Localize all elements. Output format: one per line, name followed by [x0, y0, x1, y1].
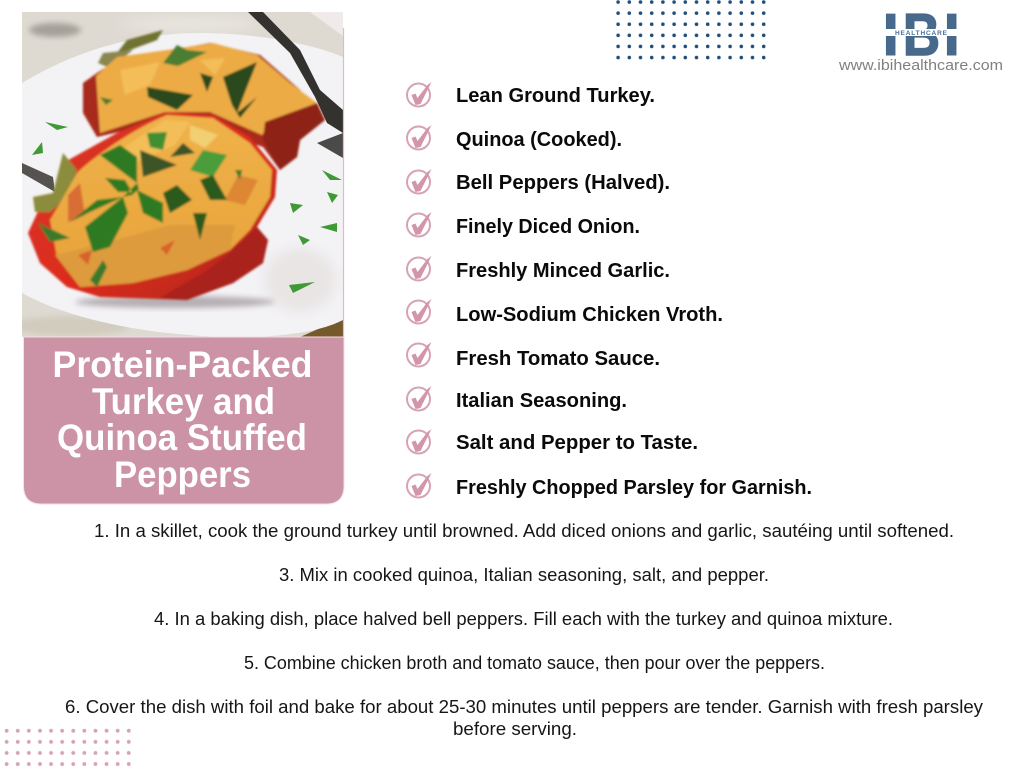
- ingredient 9: Salt and Pepper to Taste.: [456, 432, 698, 454]
- title: Peppers: [114, 454, 251, 495]
- step 6: [65, 697, 983, 739]
- parsley flakes: [32, 122, 342, 293]
- ingredient 6: Low-Sodium Chicken Vroth.: [456, 304, 723, 326]
- ingredients checklist: [407, 82, 812, 499]
- icon: check 1: [407, 82, 432, 106]
- icon: check 10: [407, 473, 432, 498]
- icon: check 9: [407, 429, 432, 454]
- plate: [22, 33, 343, 337]
- step 1: 1. In a skillet, cook the ground turkey until browned. Add diced onions and garlic, sautéing until softened.: [94, 521, 954, 541]
- decorative dots: pink: [1, 725, 135, 768]
- front parsley: [70, 145, 163, 252]
- ingredient 5: Freshly Minced Garlic.: [456, 260, 670, 282]
- step 6: before serving.: [453, 719, 577, 739]
- icon: check 6: [407, 299, 432, 324]
- website url: www.ibihealthcare.com: [838, 57, 1003, 74]
- step 4: 4. In a baking dish, place halved bell peppers. Fill each with the turkey and quinoa mixture.: [154, 609, 893, 629]
- icon: check 7: [407, 342, 432, 366]
- fork: [248, 12, 343, 133]
- logo: IBI Healthcare: I: [882, 2, 899, 68]
- ingredient 10: Freshly Chopped Parsley for Garnish.: [456, 477, 812, 499]
- step 3: 3. Mix in cooked quinoa, Italian seasoning, salt, and pepper.: [279, 565, 769, 585]
- logo: IBI Healthcare: I: [944, 2, 960, 68]
- icon: check 4: [407, 212, 432, 236]
- ingredient 3: Bell Peppers (Halved).: [456, 172, 670, 194]
- title: Turkey and: [92, 381, 275, 422]
- step 6: 6. Cover the dish with foil and bake for about 25-30 minutes until peppers are tender. Garnish with fresh parsley: [65, 697, 983, 717]
- panel: recipe photo: [10, 12, 343, 337]
- instructions text: [65, 521, 983, 739]
- back pepper: [117, 30, 163, 53]
- ingredient 2: Quinoa (Cooked).: [456, 129, 622, 151]
- photo edge: [342, 28, 344, 337]
- icon: check 8: [407, 386, 432, 410]
- front pepper: [28, 112, 277, 300]
- ingredient 1: Lean Ground Turkey.: [456, 85, 655, 107]
- decorative dots: navy: [612, 0, 770, 63]
- icon: check 2: [407, 125, 432, 150]
- title: Protein-Packed: [52, 344, 312, 385]
- logo: IBI Healthcare: B: [903, 2, 940, 68]
- icon: check 5: [407, 256, 432, 280]
- logo: IBI Healthcare: HEALTHCARE: [895, 30, 948, 37]
- back parsley: [147, 62, 257, 118]
- title: [52, 344, 312, 495]
- ingredient 8: Italian Seasoning.: [456, 390, 627, 412]
- step 5: 5. Combine chicken broth and tomato sauce, then pour over the peppers.: [244, 653, 825, 673]
- logo: IBI Healthcare: [882, 2, 960, 68]
- icon: check 3: [407, 169, 432, 194]
- ingredient 7: Fresh Tomato Sauce.: [456, 348, 660, 370]
- title: Quinoa Stuffed: [57, 417, 307, 458]
- panel: title background: [24, 337, 344, 504]
- ingredient 4: Finely Diced Onion.: [456, 216, 640, 238]
